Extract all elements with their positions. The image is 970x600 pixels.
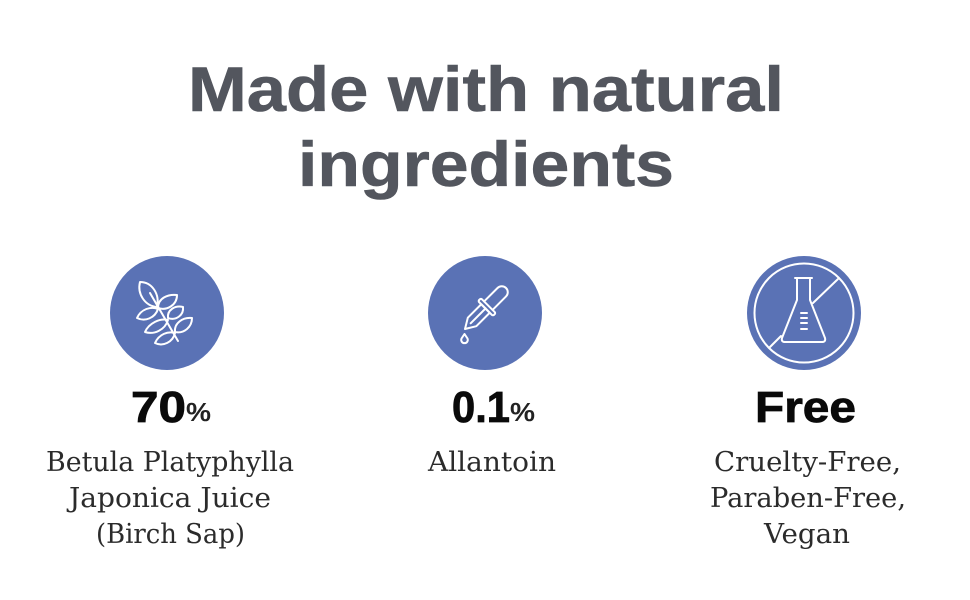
panel: allantoin: [427, 256, 556, 478]
description: free: Vegan: [763, 518, 850, 550]
stat: 0.1%: %: [510, 397, 535, 427]
description: birch sap: Betula Platyphylla: [46, 446, 294, 478]
panel: free: [710, 256, 906, 550]
description: free: Paraben-Free,: [710, 482, 906, 514]
icon: crossed flask: [747, 256, 861, 370]
description: birch sap: (Birch Sap): [96, 518, 245, 550]
stat: 70%: %: [186, 397, 211, 427]
description: birch sap: Japonica Juice: [66, 482, 271, 514]
stat: 70%: [131, 383, 211, 432]
title: Made with natural: [188, 55, 784, 125]
stat: Free: Free: [755, 383, 856, 432]
icon: dropper: [428, 256, 542, 370]
description: free: Cruelty-Free,: [714, 446, 901, 478]
panel: birch sap: [46, 256, 294, 550]
description: birch sap: [46, 446, 294, 550]
stat: 70%: 70: [131, 383, 186, 432]
icon: leaves: [110, 256, 224, 370]
title: [188, 55, 784, 200]
title: ingredients: [298, 130, 674, 200]
stat: 0.1%: 0.1: [452, 383, 510, 432]
description: allantoin: Allantoin: [427, 446, 556, 478]
description: free: [710, 446, 906, 550]
